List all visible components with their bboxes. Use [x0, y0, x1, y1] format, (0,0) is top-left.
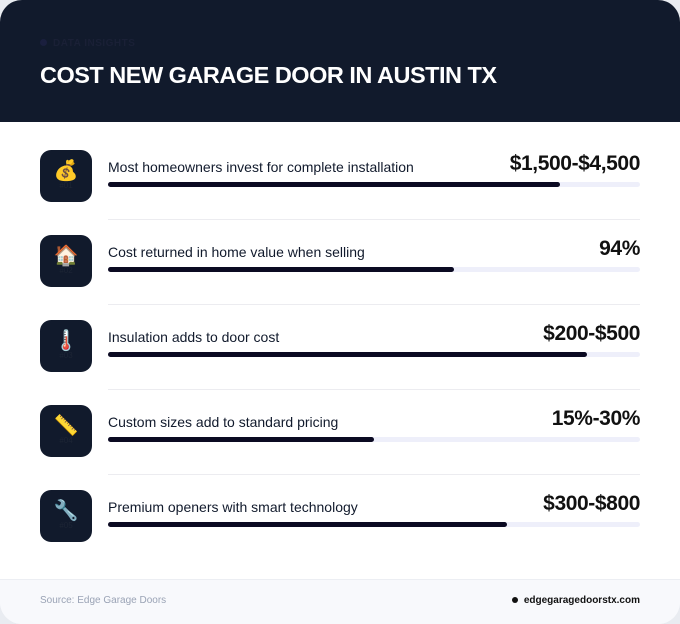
value 5: $300-$800	[543, 492, 640, 515]
icon: house: #02	[59, 266, 73, 275]
value 3: $200-$500	[543, 322, 640, 345]
row 2	[40, 235, 640, 287]
bar 1	[108, 182, 640, 187]
source: Source: Edge Garage Doors	[40, 595, 166, 606]
row 3	[40, 320, 640, 372]
row 5	[40, 490, 640, 542]
label 1: Most homeowners invest for complete installation	[108, 159, 414, 175]
value 4: 15%-30%	[552, 407, 640, 430]
icon: house: 🏠	[54, 245, 78, 267]
website: edgegaragedoorstx.com	[524, 595, 640, 606]
bar 2	[108, 267, 640, 272]
bar 3	[108, 352, 640, 357]
bar 4	[108, 437, 640, 442]
value 1: $1,500-$4,500	[510, 152, 640, 175]
footer	[0, 579, 680, 624]
icon: money bag: #01	[59, 181, 73, 190]
icon: wrench	[40, 490, 92, 542]
icon: thermometer: 🌡️	[54, 330, 78, 352]
row 1	[40, 150, 640, 202]
tag: data insights: DATA INSIGHTS	[53, 38, 135, 49]
icon: thermometer: #03	[59, 351, 73, 360]
label 5: Premium openers with smart technology	[108, 499, 358, 515]
value 2: 94%	[599, 237, 640, 260]
label 3: Insulation adds to door cost	[108, 329, 279, 345]
icon: thermometer	[40, 320, 92, 372]
icon: house	[40, 235, 92, 287]
icon: money bag: 💰	[54, 160, 78, 182]
label 2: Cost returned in home value when selling	[108, 244, 365, 260]
icon: money bag	[40, 150, 92, 202]
icon: wrench: 🔧	[54, 500, 78, 522]
label 4: Custom sizes add to standard pricing	[108, 414, 338, 430]
header	[0, 0, 680, 122]
title: COST NEW GARAGE DOOR IN AUSTIN TX	[40, 62, 497, 88]
icon: ruler	[40, 405, 92, 457]
icon: ruler: #04	[59, 436, 73, 445]
bar 5	[108, 522, 640, 527]
row 4	[40, 405, 640, 457]
icon: wrench: #05	[59, 521, 73, 530]
icon: ruler: 📏	[54, 415, 78, 437]
